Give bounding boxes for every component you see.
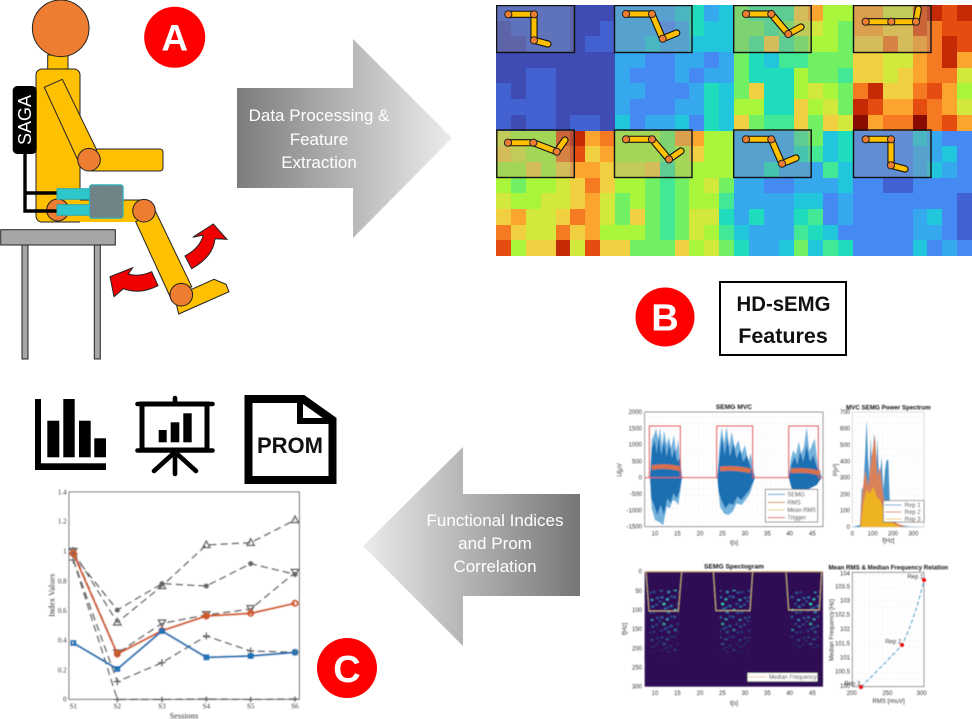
point labels: Rep 2 [885,639,902,645]
arrow: functional indices: Correlation [453,557,537,576]
y axis labels: 0.8 [58,577,67,585]
HD-sEMG features label: HD-sEMG [736,292,830,316]
axis labels: 103.5 [835,584,851,590]
chart: SEMG MVC time series: 45 [809,531,816,537]
legend: Median Frequency [769,675,817,681]
chart: MVC power spectrum: 0 [851,531,855,537]
axis labels: 1500 [629,426,643,432]
axis labels: 200 [840,492,851,498]
axis labels: 0 [639,570,643,576]
icon: bar chart [35,399,106,470]
overlay: pose 2 [614,6,692,52]
chart: SEMG MVC time series: 25 [719,531,726,537]
axis labels: 200 [632,647,643,653]
chart: SEMG spectrogram: 40 [786,691,794,697]
HD-sEMG features label: Features [738,324,828,348]
badge A: A [161,18,188,58]
RMS envelopes [652,467,820,473]
heat map: pose 7 [734,131,853,256]
legend: Rep 2 [905,510,921,516]
overlay: 90 degree pose [496,6,574,52]
heat map: pose 8 [853,131,972,256]
body figure [32,0,229,314]
arrow: functional indices [363,447,580,646]
axis labels: 100 [632,608,643,614]
x axis labels: S1 [70,703,78,711]
chart: SEMG MVC time series: 30 [742,531,749,537]
badge A [144,7,205,68]
legend: Rep 1 [905,503,921,509]
chart: SEMG MVC time series: 15 [674,531,681,537]
chart: SEMG MVC time series: 10 [652,531,659,537]
axis labels: 100 [840,509,851,515]
axis labels: 101 [840,656,851,662]
point labels: Rep 3 [844,681,861,687]
legend: Mean RMS [787,508,816,514]
sensor connectors [57,189,90,215]
axis labels: 1000 [629,443,643,449]
chart: SEMG MVC time series: 40 [786,531,794,537]
axis labels: 101.5 [835,641,851,647]
axis labels: 104 [840,571,851,577]
chart: SEMG MVC time series: 35 [764,531,771,537]
axis labels: 100.5 [835,670,851,676]
overlay: full extension pose [854,6,931,52]
axis labels: 400 [840,459,851,465]
x axis labels: S3 [158,703,166,711]
overlay: pose 5 [497,130,574,178]
x axis labels: S6 [291,703,299,711]
axis labels: -500 [630,492,643,498]
axis labels: 600 [840,426,851,432]
chair [1,230,115,359]
overlay: pose 7 [734,130,811,178]
knee angle overlays on the heat maps [496,5,932,178]
x axis labels: S4 [203,703,211,711]
axis labels [840,410,851,531]
axis labels: 102.5 [835,612,851,618]
axis labels: -1000 [627,508,643,514]
chart: SEMG spectrogram: SEMG Spectogram [704,564,764,571]
y axis labels: 1.2 [58,518,67,526]
SAGA amplifier: SAGA [15,95,35,145]
heat map: pose 4 [853,5,972,131]
chart: MVC power spectrum [833,404,931,545]
median frequency line [645,572,823,611]
spectrum areas [852,419,924,527]
chart: SEMG spectrogram: t[s] [730,701,738,707]
chart: SEMG spectrogram: 45 [809,691,816,697]
legend [765,489,818,522]
legend [883,501,924,523]
heat map: pose 1 [496,5,615,131]
HD-sEMG features label [720,282,846,355]
chart: SEMG MVC time series: 20 [697,531,704,537]
axis labels: 700 [840,410,851,416]
badge C: C [333,649,361,691]
panel B: HD-sEMG heat maps [496,5,972,256]
axis labels [632,570,643,691]
SAGA amplifier [13,86,37,154]
repetition points [859,578,926,689]
arrow: functional indices: Functional Indices [426,511,564,530]
heat map: pose 2 [615,5,734,131]
axis labels [835,571,851,690]
signal bursts dense core [650,437,822,515]
legend [747,673,818,682]
y axis labels: 1 [63,548,67,556]
line chart: index values by session [48,488,299,719]
chart: SEMG spectrogram: 25 [719,691,726,697]
axis labels: 500 [632,459,643,465]
chart: SEMG MVC time series: t[s] [730,540,738,546]
axis labels: 103 [840,598,851,604]
axis labels: -1500 [627,525,643,531]
x axis labels: S5 [247,703,255,711]
HD-sEMG electrode grid [90,185,123,218]
point labels: Rep 1 [907,575,924,581]
axis labels: 100 [840,684,851,690]
electrode cables [25,154,58,211]
legend: RMS [787,500,801,506]
icon: presentation board [138,398,212,474]
series markers [70,516,299,702]
chart: mean RMS versus median frequency [828,564,948,705]
chart: mean RMS versus median frequency: Median Frequency [Hz] [829,599,835,661]
axis labels: 0 [847,525,851,531]
y axis labels: 0 [63,696,67,704]
legend: SEMG [787,492,805,498]
axis labels [627,410,643,531]
overlay: pose 6 [614,130,692,178]
y axis labels: 0.2 [58,666,67,674]
panel A: seated subject on a chair [1,0,229,359]
chart: SEMG spectrogram: 15 [674,691,681,697]
y axis labels: 1.4 [58,488,67,496]
y axis title: Index Values [48,574,57,617]
chart: MVC power spectrum: f[Hz] [882,539,895,545]
heat map: pose 3 [734,5,853,131]
chart: mean RMS versus median frequency: Mean RMS & Median Frequency Relation [828,564,948,571]
x axis labels [70,703,299,711]
chart: SEMG MVC time series: SEMG MVC [716,404,752,411]
chart: MVC power spectrum: 100 [868,531,878,537]
chart: MVC power spectrum: MVC SEMG Power Spectrum [846,404,931,411]
chart: SEMG spectrogram: f[Hz] [623,623,629,635]
chart: mean RMS versus median frequency: 250 [882,691,893,697]
arrow: data processing: Feature [290,130,348,149]
point labels [844,575,924,687]
arrow: data processing: Data Processing & [249,106,390,125]
axis labels: 0 [639,476,643,482]
spectrogram speckle [650,590,819,657]
arrow: data processing [237,39,452,238]
chart: SEMG spectrogram: 35 [764,691,771,697]
chart: mean RMS versus median frequency: RMS [/muV] [873,699,905,705]
arrow: data processing: Extraction [281,153,357,172]
axis labels: 50 [635,589,643,595]
x axis labels: S2 [114,703,122,711]
chart: SEMG spectrogram: 10 [652,691,659,697]
arrow: functional indices: and Prom [458,534,532,553]
axis labels: 102 [840,627,851,633]
arrow: knee extension [185,224,227,269]
chart: SEMG MVC time series [618,404,823,546]
y axis labels: 0.6 [58,607,67,615]
chart: MVC power spectrum: 300 [908,531,919,537]
badge B: B [651,298,679,340]
chart: mean RMS versus median frequency: 200 [847,691,857,697]
y axis labels: 0.4 [58,637,67,645]
icon: PROM document [248,398,334,480]
axis labels: 300 [632,685,643,691]
legend: Trigger [787,516,806,522]
axis labels: 2000 [629,410,643,416]
icon: PROM document: PROM [257,433,323,458]
axis labels: 300 [840,476,851,482]
dashed reference series [73,520,295,699]
badge B [636,288,694,346]
overlay: pose 3 [734,6,811,52]
chart: SEMG spectrogram: 30 [742,691,749,697]
spectrogram fade-out [645,612,823,662]
signal bursts light envelope [650,427,822,525]
orange series [71,551,298,657]
heat map: pose 5 [496,131,615,256]
chart: mean RMS versus median frequency: 300 [917,691,927,697]
arrow: knee flexion [110,268,158,297]
overlay: pose 8 [854,130,931,178]
y axis labels [58,488,67,704]
axis labels: 250 [632,666,643,672]
heat map: pose 6 [615,131,734,256]
plot frame [69,492,299,699]
dashed relation line [861,580,924,687]
blue series [71,629,297,671]
chart: SEMG MVC time series: U[μV [618,463,624,477]
chart: MVC power spectrum: P[v²] [833,464,839,476]
chart: MVC power spectrum: 200 [888,531,899,537]
chart: SEMG spectrogram: 20 [697,691,704,697]
badge C [317,638,377,698]
legend: Rep 3 [905,517,921,523]
axis labels: 500 [840,443,851,449]
axis labels: 150 [632,627,643,633]
chart: SEMG spectrogram [623,564,823,707]
